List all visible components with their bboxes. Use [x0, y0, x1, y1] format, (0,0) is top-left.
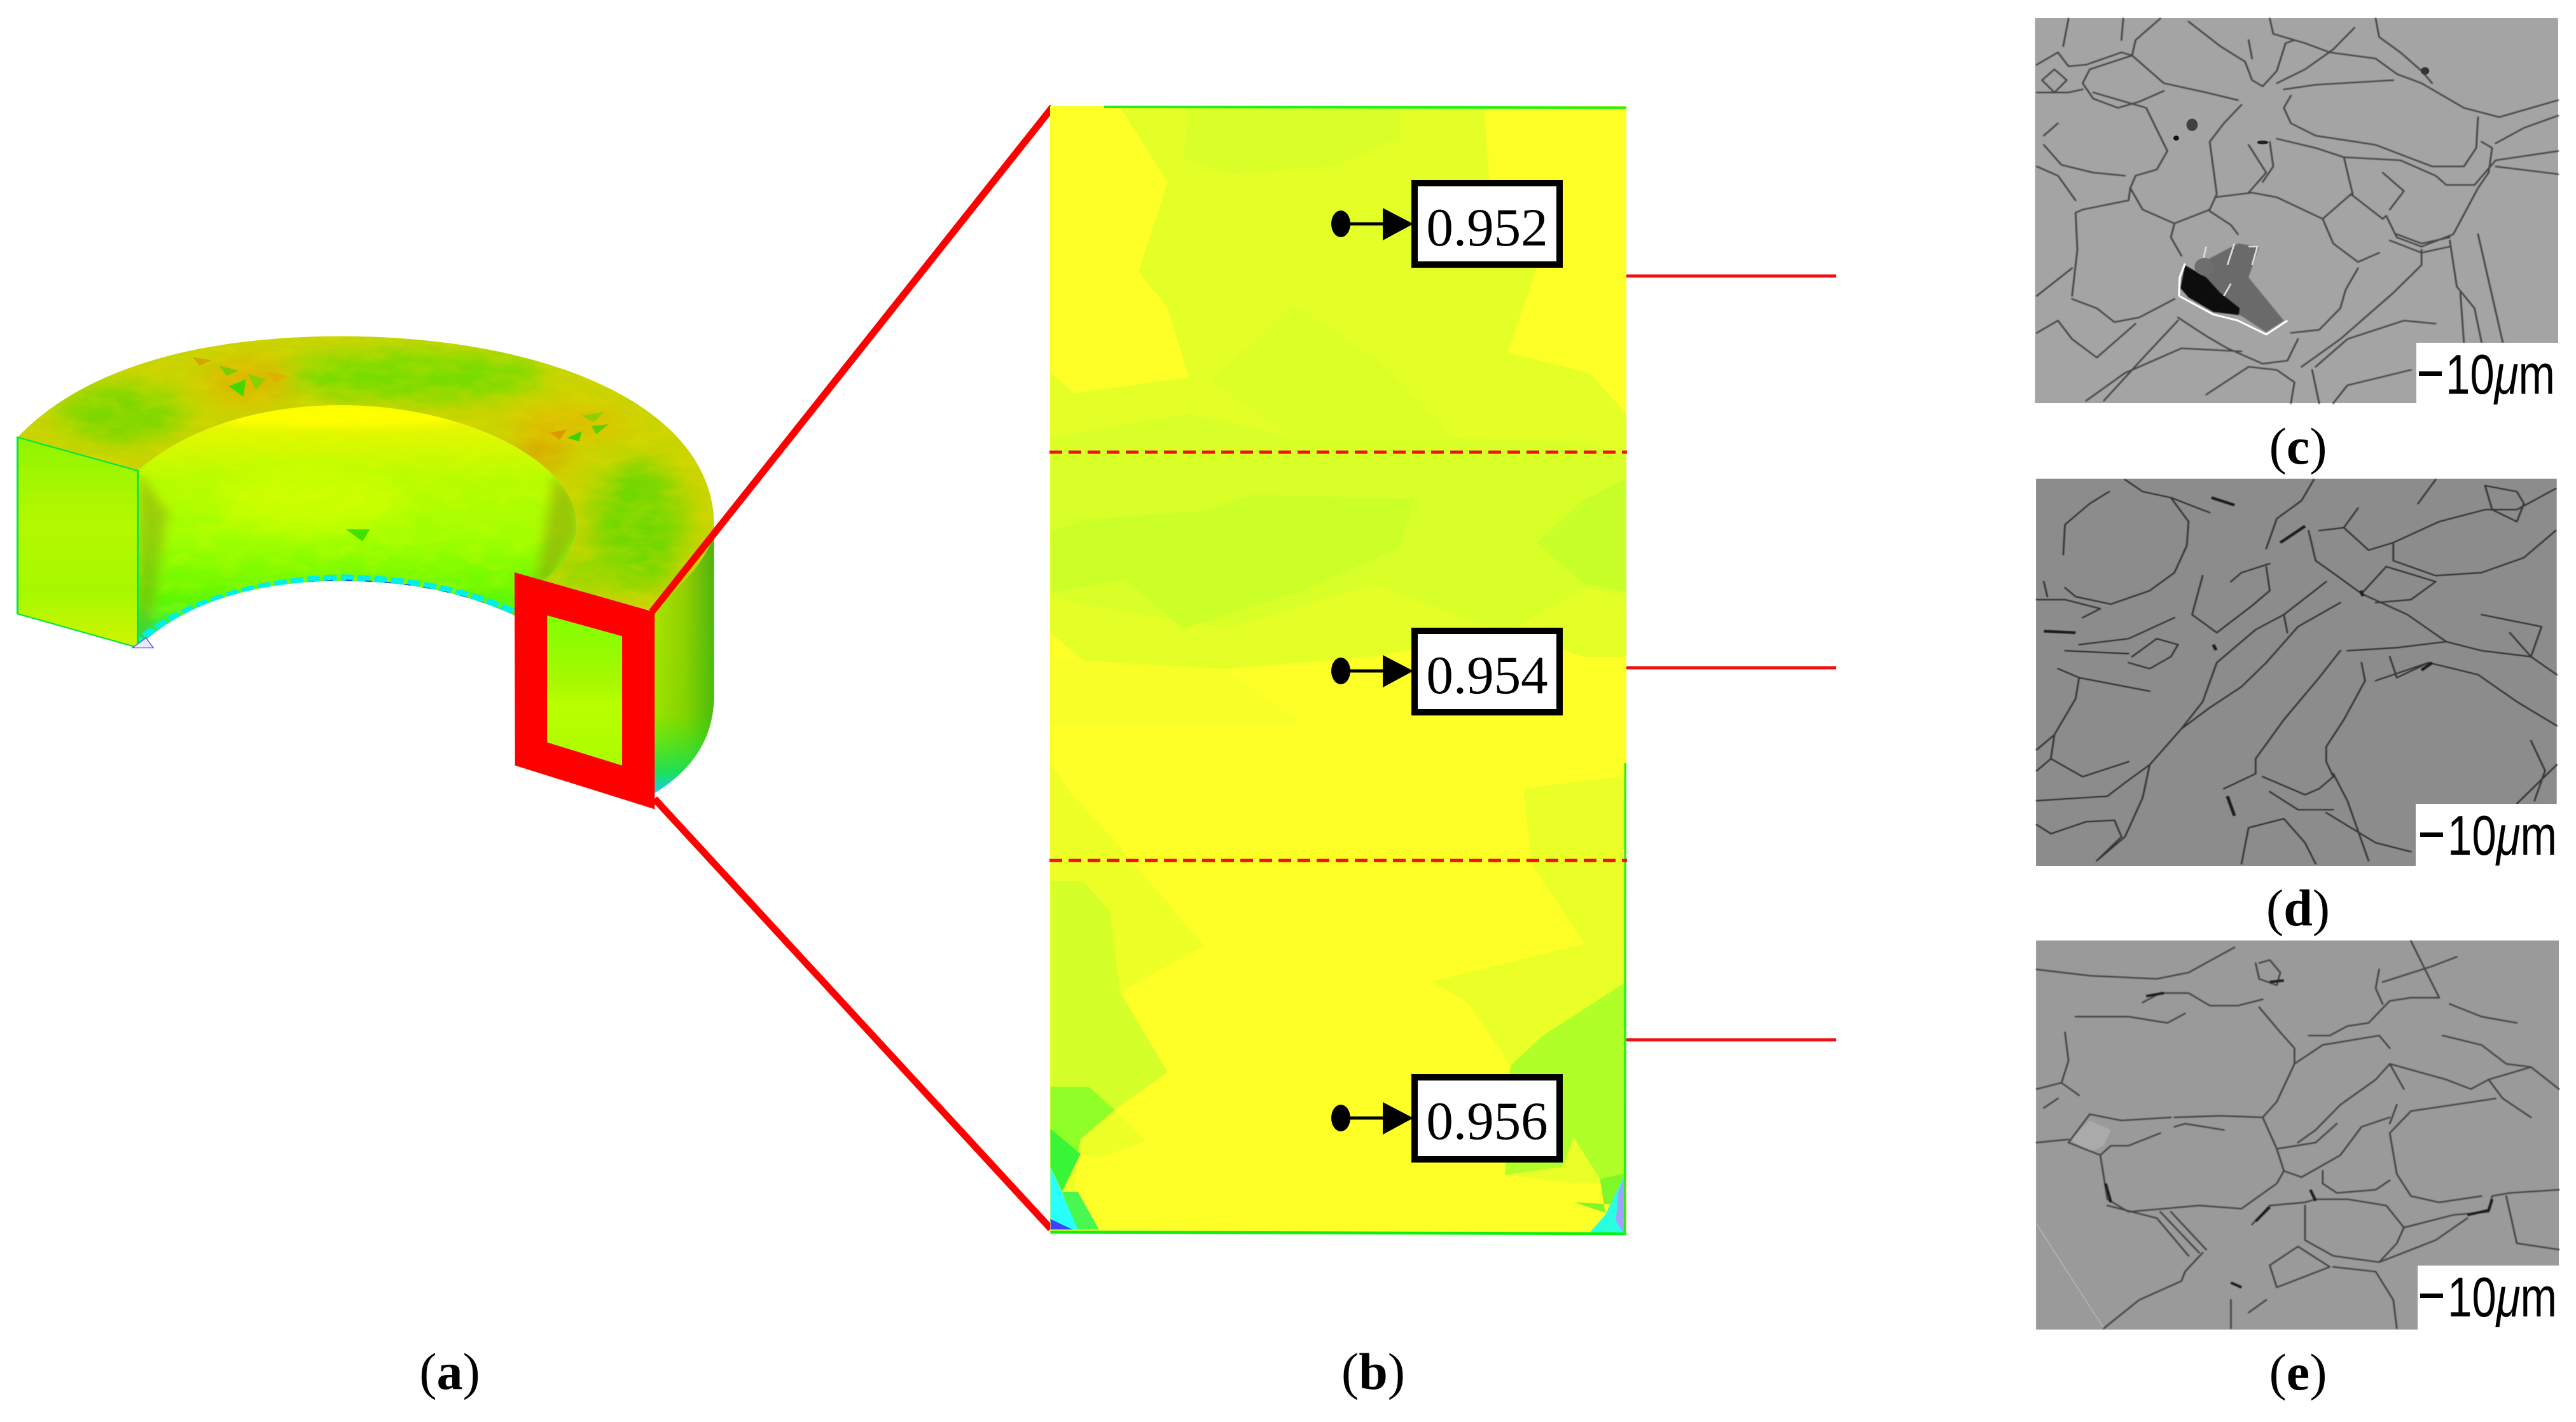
leader line to image c [1626, 275, 1836, 277]
label c: (c) [2269, 417, 2327, 475]
dashed section divider upper [1049, 450, 1627, 454]
scale bar d: 10μm [2448, 804, 2557, 867]
upper contour patches [1051, 107, 1626, 725]
lower contour patches [1051, 763, 1626, 1234]
leader line to image e [1626, 1038, 1836, 1042]
callout 0.956: 0.956 [1426, 1091, 1548, 1151]
label d: (d) [2266, 879, 2330, 937]
ring cut face [18, 438, 138, 647]
red connector lines from frame to enlarged section [652, 107, 1053, 1229]
scale bar c: 10μm [2446, 343, 2555, 406]
ring inner wall [136, 403, 579, 647]
panel b: enlarged section density contour [1049, 106, 1627, 1234]
central pore [2173, 67, 2429, 335]
red zoom frame [515, 572, 654, 809]
callout 0.954 [1331, 631, 1560, 712]
panel c: micrograph upper section [2035, 18, 2559, 406]
callout 0.954: 0.954 [1426, 645, 1548, 705]
label b: (b) [1341, 1343, 1405, 1400]
label e: (e) [2269, 1343, 2327, 1401]
scale bar e: 10μm [2448, 1266, 2557, 1329]
callout 0.952 [1331, 183, 1560, 265]
dashed section divider lower [1049, 859, 1627, 862]
panel e: micrograph lower section [2036, 941, 2559, 1331]
ring outer wall [650, 526, 714, 793]
callout 0.952: 0.952 [1426, 198, 1548, 258]
panel d: micrograph middle section [2036, 479, 2558, 867]
mesh remnant at cut corner [132, 638, 153, 648]
ring top face [18, 336, 714, 611]
label a: (a) [419, 1343, 480, 1400]
leader line to image d [1626, 666, 1836, 669]
callout 0.956 [1331, 1077, 1560, 1159]
panel a: cut-away ring density model [0, 326, 730, 809]
